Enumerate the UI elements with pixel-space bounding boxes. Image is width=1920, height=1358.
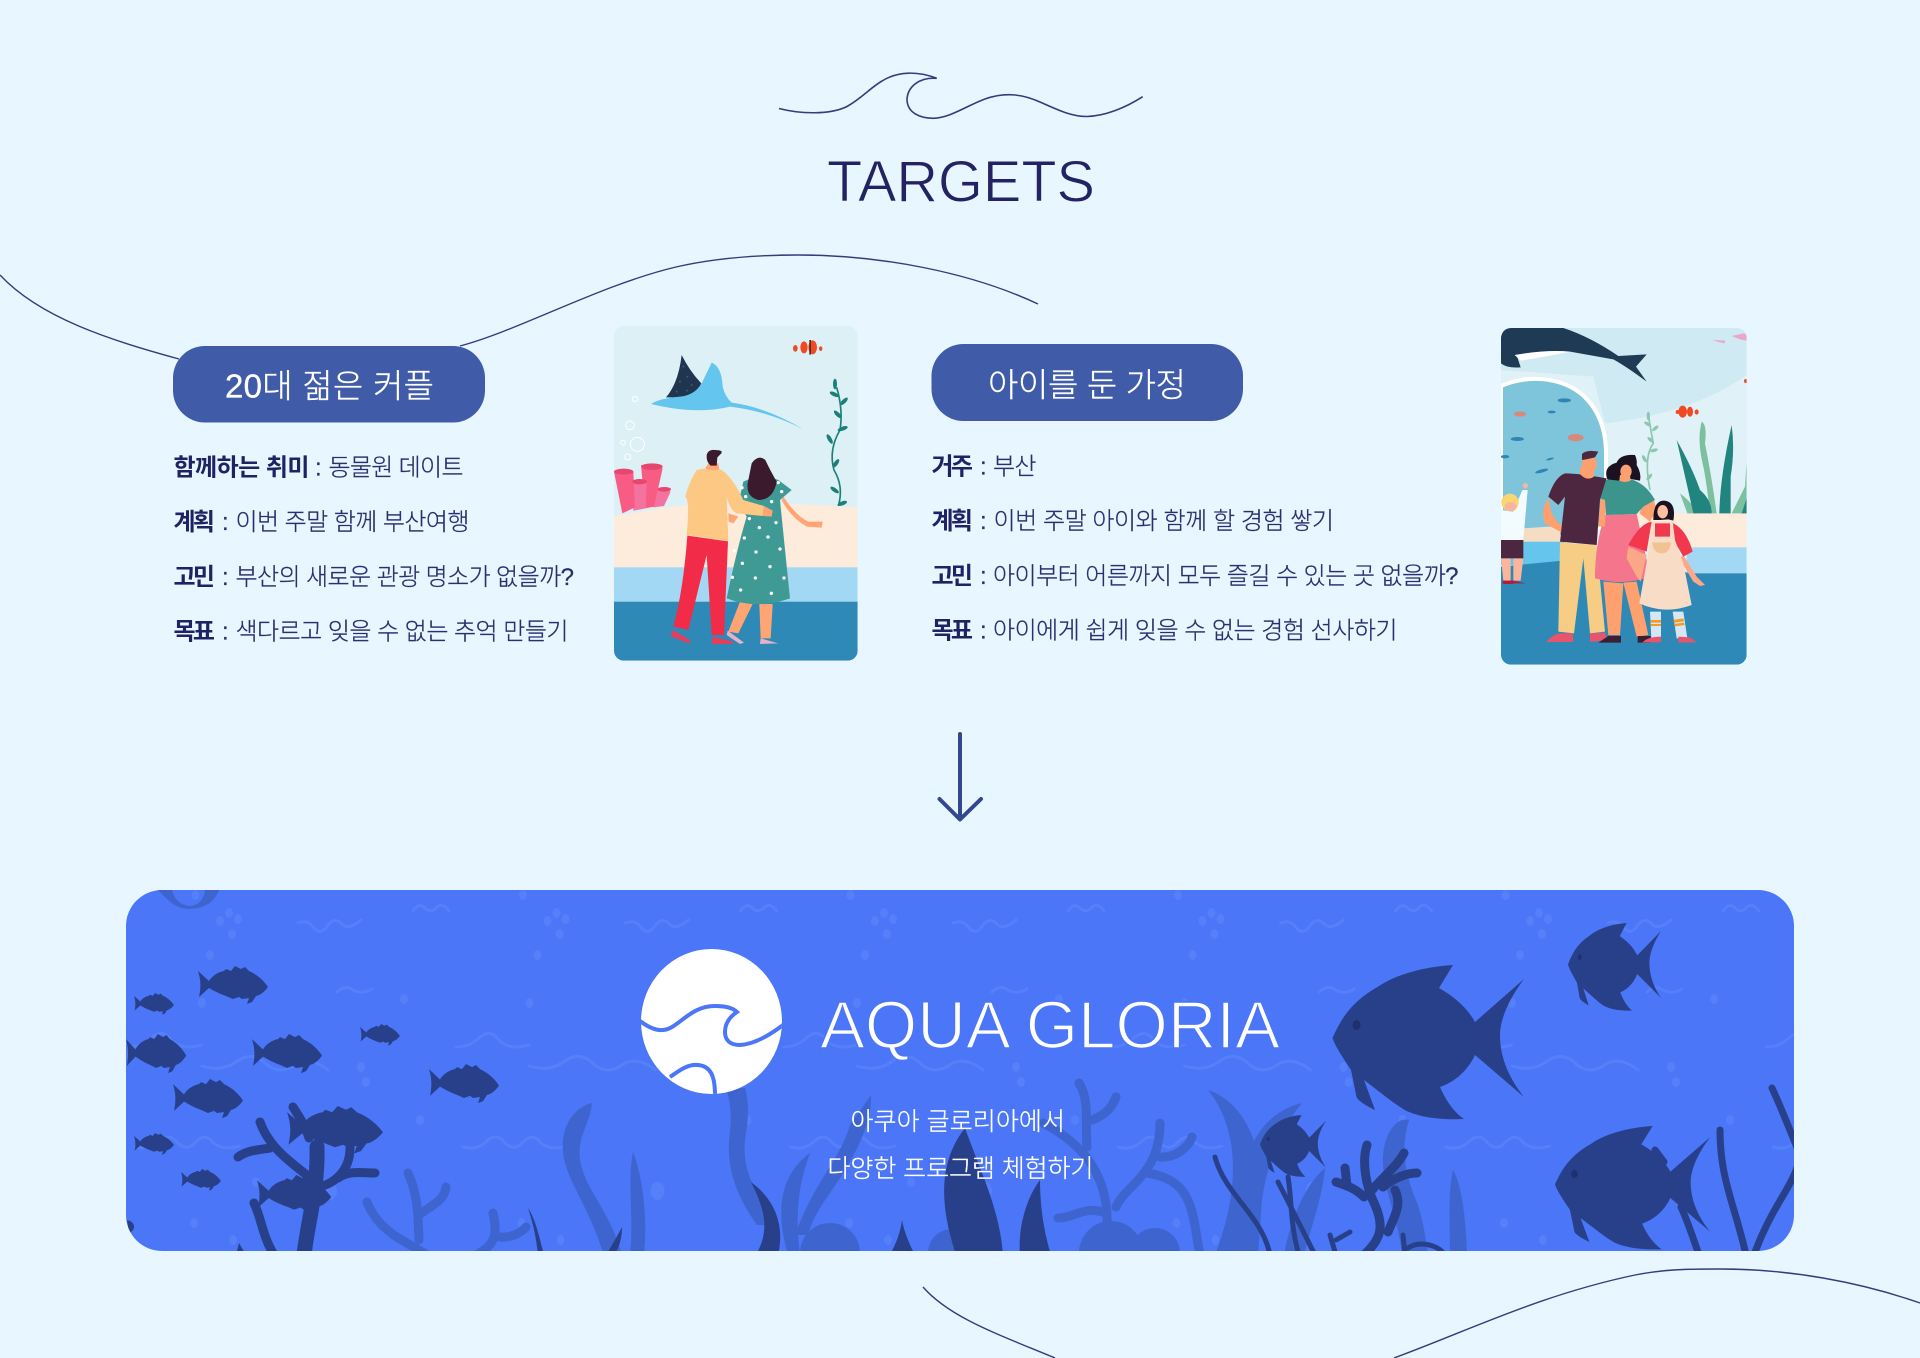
light seaweed and coral (563, 1088, 1467, 1255)
icon: whale (1501, 328, 1647, 382)
figure: man (671, 450, 773, 644)
pill: young couples: 20대 젊은 커플 (225, 368, 434, 404)
brand name: AQUA GLORIA (820, 989, 1281, 1063)
figure: mother (1595, 455, 1657, 643)
panel: families with children (932, 344, 1458, 644)
text line: hobby: 함께하는 취미 (174, 454, 310, 482)
light fish at top left (158, 890, 219, 909)
icon: stingray (651, 355, 803, 429)
text line: plan: : (222, 509, 229, 536)
flowing line behind pill (0, 255, 1038, 359)
decorative wave icon above title (779, 73, 1143, 118)
flowing line bottom (923, 1269, 1920, 1358)
text line: hobby: : (315, 454, 322, 482)
text line: concern: 부산의 새로운 관광 명소가 없을까? (236, 564, 574, 591)
tank fish (1501, 398, 1584, 474)
figure: woman (727, 458, 823, 644)
banner caption (828, 1108, 1094, 1183)
text line: plan: 계획 (932, 508, 973, 535)
underwater scenery (126, 890, 1794, 1251)
bubbles (621, 396, 644, 460)
school of small fish (126, 966, 499, 1215)
panel: banner (126, 890, 1794, 1251)
text line: plan: : (980, 508, 987, 535)
text line: plan: 계획 (174, 509, 215, 536)
text line: goal: 목표 (932, 618, 973, 644)
text line: plan: 이번 주말 아이와 함께 할 경험 쌓기 (994, 508, 1334, 535)
text line: concern: 고민 (932, 563, 973, 590)
rocks (800, 1221, 1180, 1251)
text line: hobby: 동물원 데이트 (328, 454, 464, 482)
logo (640, 949, 783, 1095)
text line: hobby (174, 454, 464, 482)
text line: residence (932, 454, 1036, 480)
pill: young couples (173, 346, 485, 422)
text line: concern: 아이부터 어른까지 모두 즐길 수 있는 곳 없을까? (993, 563, 1458, 590)
tank arch (1501, 379, 1606, 565)
dark blades (127, 1128, 1051, 1255)
wall, water, floor (1501, 513, 1747, 665)
banner caption: 아쿠아 글로리아에서 (850, 1108, 1065, 1136)
text line: concern: : (222, 564, 229, 591)
banner background (126, 890, 1794, 1251)
arrow (940, 734, 981, 820)
figure: father (1543, 451, 1607, 642)
icon: seaweed (825, 379, 849, 507)
text line: goal: : (980, 618, 987, 644)
banner caption: 다양한 프로그램 체험하기 (828, 1155, 1094, 1183)
icon: clownfish (793, 340, 822, 355)
sand, water, floor (614, 503, 858, 661)
icon: pink coral (614, 463, 671, 513)
icon: seaweed (1641, 412, 1747, 513)
text line: goal: 아이에게 쉽게 잊을 수 없는 경험 선사하기 (993, 618, 1398, 644)
text line: plan: 이번 주말 함께 부산여행 (236, 509, 470, 536)
text line: concern: : (980, 563, 987, 590)
dark plants and coral (238, 1088, 1798, 1255)
illustration: couple at aquarium (614, 326, 858, 661)
text line: residence: 부산 (993, 454, 1036, 480)
text line: goal: 색다르고 잊을 수 없는 추억 만들기 (236, 618, 568, 646)
illustration: family at aquarium (1501, 328, 1747, 665)
title: TARGETS (827, 150, 1095, 214)
text line: goal: 목표 (174, 618, 215, 646)
pill: families (932, 344, 1243, 421)
text line: goal: : (222, 618, 229, 646)
text line: residence: : (980, 454, 987, 480)
panel: young couples (173, 346, 574, 646)
figure: daughter (1627, 501, 1705, 642)
icon: pink fish (1712, 333, 1747, 343)
text line: concern: 고민 (174, 564, 215, 591)
pill: families: 아이를 둔 가정 (988, 366, 1186, 404)
text line: residence: 거주 (932, 454, 973, 480)
figure: child on the left (1501, 483, 1528, 584)
angelfish (1260, 923, 1710, 1249)
icon: clownfish (1676, 379, 1747, 418)
